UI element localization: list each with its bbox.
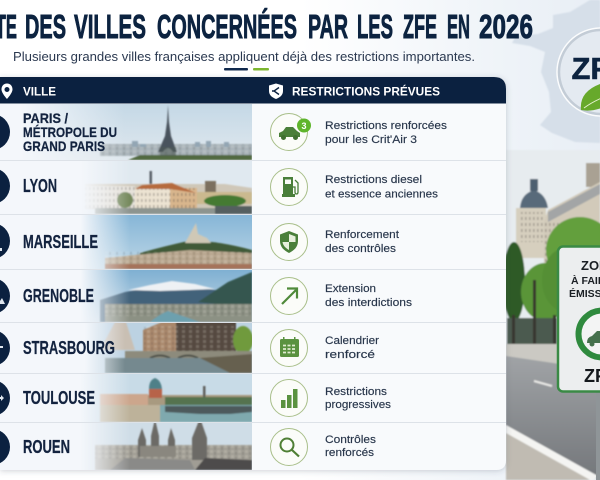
icon: shield bbox=[270, 224, 308, 260]
row 1: Paris bbox=[0, 104, 252, 160]
row 5: Strasbourg bbox=[0, 321, 253, 373]
subtitle: Plusieurs grandes villes françaises appliquent déjà des restrictions importantes. bbox=[13, 49, 475, 64]
restriction text: Renforcement bbox=[325, 229, 399, 241]
icon: city marker Lyon bbox=[0, 168, 10, 204]
icon: city marker Marseille bbox=[0, 223, 10, 259]
restriction text: pour les Crit'Air 3 bbox=[325, 134, 417, 146]
badge leaf bbox=[581, 84, 600, 111]
street photo bbox=[503, 150, 600, 480]
photo: Marseille bbox=[82, 215, 252, 269]
photo: Toulouse bbox=[85, 374, 252, 422]
street trees bbox=[503, 217, 600, 364]
row 6: Toulouse bbox=[0, 374, 252, 422]
restriction text: renforcés bbox=[325, 447, 375, 459]
city name: Grenoble: GRENOBLE bbox=[23, 286, 94, 306]
building bbox=[516, 163, 600, 300]
title: 2026 bbox=[479, 8, 533, 45]
restriction text: des interdictions bbox=[325, 297, 413, 309]
photo: Rouen bbox=[86, 423, 252, 470]
table card bbox=[0, 77, 506, 470]
icon: city marker Paris bbox=[0, 114, 10, 150]
ZFE badge bbox=[557, 28, 600, 116]
row 3: Marseille bbox=[0, 215, 252, 269]
city name: Paris: GRAND PARIS bbox=[23, 138, 105, 154]
row separators bbox=[0, 160, 506, 422]
header label: city: VILLE bbox=[23, 84, 56, 98]
restriction 6 bbox=[270, 380, 392, 416]
restriction text bbox=[325, 283, 413, 309]
title: EN bbox=[447, 8, 470, 45]
table panel bbox=[0, 77, 506, 470]
restriction text bbox=[325, 386, 392, 411]
sign plate bbox=[558, 246, 600, 392]
photo: Lyon bbox=[85, 161, 252, 214]
city name: Strasbourg: STRASBOURG bbox=[23, 338, 115, 358]
icon: upward arrow bbox=[270, 278, 308, 314]
restriction 2 bbox=[270, 168, 439, 206]
photo: Grenoble bbox=[82, 270, 252, 322]
title: CONCERNÉES bbox=[157, 8, 297, 45]
background map of France bbox=[512, 0, 600, 143]
photo: Paris bbox=[29, 104, 252, 160]
icon: car with Crit'Air 3 badge: 3 bbox=[301, 121, 307, 131]
sign pole bbox=[596, 392, 600, 480]
restriction text bbox=[325, 229, 399, 255]
row 7: Rouen bbox=[0, 418, 252, 470]
city name: Paris: MÉTROPOLE DU bbox=[23, 124, 117, 140]
restriction text bbox=[325, 174, 439, 200]
icon: city marker Toulouse bbox=[0, 380, 10, 416]
icon: city marker Grenoble bbox=[0, 278, 10, 314]
icon: fuel pump bbox=[270, 168, 308, 206]
icon: magnifying glass bbox=[270, 428, 308, 466]
title: DES bbox=[25, 8, 66, 45]
row 2: Lyon bbox=[0, 161, 252, 214]
icon: car with Crit'Air 3 badge bbox=[270, 114, 311, 150]
icon: rising bars bbox=[270, 380, 308, 416]
restriction 4 bbox=[270, 278, 413, 314]
icon: city marker Strasbourg bbox=[0, 330, 10, 366]
city name: Lyon: LYON bbox=[23, 176, 57, 196]
restriction 5 bbox=[270, 330, 379, 366]
title: LES bbox=[357, 8, 393, 45]
restriction text: Restrictions diesel bbox=[325, 174, 422, 186]
city name: Rouen: ROUEN bbox=[23, 437, 70, 457]
road bbox=[506, 356, 600, 480]
restriction text: progressives bbox=[325, 399, 392, 411]
title: VILLES bbox=[74, 8, 146, 45]
restriction text bbox=[325, 335, 379, 361]
restriction text: Restrictions bbox=[325, 386, 388, 398]
restriction 1 bbox=[270, 114, 448, 150]
restriction 3 bbox=[270, 224, 399, 260]
icon: shield bbox=[269, 84, 283, 99]
restriction text: Extension bbox=[325, 283, 376, 295]
table header bbox=[0, 77, 506, 104]
restriction text: et essence anciennes bbox=[325, 188, 439, 200]
sign green ring with car bbox=[578, 310, 600, 358]
city name: Paris bbox=[23, 110, 117, 154]
restriction text: renforcé bbox=[325, 349, 375, 361]
city name: Marseille: MARSEILLE bbox=[23, 232, 98, 252]
restriction text: des contrôles bbox=[325, 243, 397, 255]
title accent rule bbox=[224, 68, 269, 70]
restriction 7 bbox=[270, 428, 377, 466]
city name: Toulouse: TOULOUSE bbox=[23, 388, 95, 408]
icon: city marker Rouen bbox=[0, 429, 10, 465]
city name: Paris: PARIS / bbox=[23, 110, 68, 126]
ZFE sign bbox=[558, 246, 600, 480]
header label: restrictions: RESTRICTIONS PRÉVUES bbox=[292, 84, 440, 98]
restriction text: Restrictions renforcées bbox=[325, 120, 448, 132]
icon: location pin bbox=[2, 84, 12, 99]
restriction text: Contrôles bbox=[325, 434, 377, 446]
restriction text: Calendrier bbox=[325, 335, 379, 347]
restriction text bbox=[325, 434, 377, 459]
photo: Strasbourg bbox=[88, 323, 252, 373]
title: ZFE bbox=[403, 8, 437, 45]
icon: calendar bbox=[270, 330, 308, 366]
restriction text bbox=[325, 120, 448, 146]
title: PAR bbox=[308, 8, 348, 45]
row 4: Grenoble bbox=[0, 270, 252, 322]
